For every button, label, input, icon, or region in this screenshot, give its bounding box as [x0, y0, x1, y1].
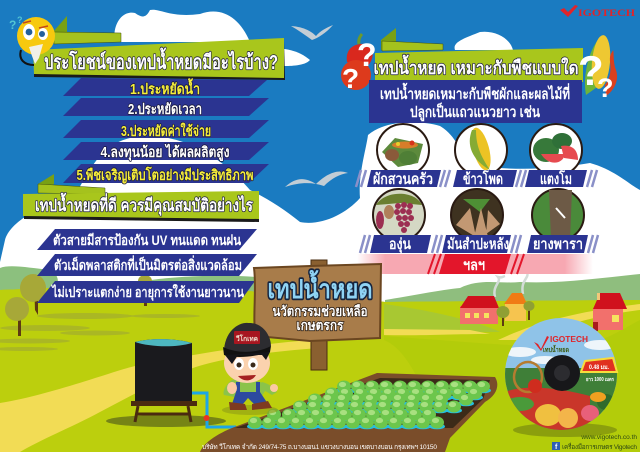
irrigation pipe — [192, 393, 236, 427]
benefit 2 — [63, 98, 269, 118]
product disc: ยาว 1000 เมตร — [586, 377, 614, 383]
benefit 5 — [63, 164, 269, 184]
far hills centre — [130, 276, 280, 300]
heading: benefits banner — [33, 16, 285, 80]
cloud: small right of banner — [268, 48, 310, 66]
village trees — [496, 301, 534, 326]
far hills left — [0, 266, 58, 292]
icon: thinking face: ? — [17, 15, 22, 25]
callout: crops suited text: เทปน้ำหยดเหมาะกับพืชผักและผลไม้ที่ — [380, 82, 570, 103]
quality 1: ตัวสายมีสารป้องกัน UV ทนแดด ทนฝน — [53, 232, 241, 248]
crop label: ยางพารา — [533, 236, 583, 253]
darker green field right — [384, 304, 500, 332]
label: etc — [428, 254, 524, 274]
product disc: เทปน้ำหยด — [543, 344, 569, 354]
footer: company address: บริษัท วีโกเทค จำกัด 249/74-75 ถ.บางบอน1 แขวงบางบอน เขตบางบอน กรุงเทพฯ 10150 — [202, 443, 437, 451]
benefit 3 — [63, 120, 269, 140]
quality 1 — [37, 229, 257, 250]
footer: facebook — [552, 442, 637, 451]
icon: thinking face: ? — [9, 18, 16, 32]
quality 3 — [37, 281, 255, 303]
product disc: 0.48 มม. — [589, 364, 609, 371]
benefit 1: 1.ประหยัดน้ำ — [130, 78, 200, 98]
logo: Vigotech — [560, 5, 636, 19]
icon: thinking face — [9, 15, 55, 65]
heading: suitable crops banner — [374, 28, 583, 82]
wooden sign: เกษตรกร — [296, 317, 344, 333]
path right — [384, 329, 490, 335]
icon: pepper and tomato with question marks: ? — [357, 37, 377, 73]
quality 3: ไม่เปราะแตกง่าย อายุการใช้งานยาวนาน — [50, 283, 244, 301]
crop label: แตงโม — [540, 169, 572, 188]
product disc — [504, 318, 617, 437]
heading: qualities banner: เทปน้ำหยดที่ดี ควรมีคุณสมบัติอย่างไร — [35, 192, 254, 216]
callout: crops suited text — [369, 80, 582, 123]
farmer boy mascot: วีโกเทค — [235, 334, 258, 343]
label: etc: ฯลฯ — [463, 257, 485, 274]
benefit 1 — [63, 78, 267, 98]
quality 2 — [37, 254, 257, 276]
sign subtitle: นวัตกรรมช่วยเหลือ — [272, 303, 368, 319]
footer: facebook: เครื่องมือการเกษตร Vigotech — [562, 442, 637, 451]
birds — [285, 25, 348, 187]
house 2 — [504, 293, 527, 321]
benefit 4: 4.ลงทุนน้อย ได้ผลผลิตสูง — [100, 143, 230, 161]
pink band — [357, 254, 593, 274]
footer: website: www.vigotech.co.th — [580, 434, 637, 441]
crop label: ข้าวโพด — [463, 169, 503, 188]
far hills right — [385, 274, 640, 310]
farm plot — [200, 373, 497, 452]
quality 2: ตัวเม็ดพลาสติกที่เป็นมิตรต่อสิ่งแวดล้อม — [54, 255, 242, 273]
banner shape — [34, 41, 285, 80]
product disc: IGOTECH — [550, 335, 588, 344]
cloud bank — [0, 122, 640, 320]
crop label: องุ่น — [389, 236, 412, 254]
heading: qualities banner — [23, 174, 259, 222]
benefit 4 — [63, 142, 269, 161]
crop: cassava — [432, 189, 521, 253]
wooden sign — [254, 260, 381, 370]
icon: corn and chili with question marks — [578, 34, 617, 103]
banner title: ประโยชน์ของเทปน้ำหยดมีอะไรบ้าง? — [44, 47, 278, 74]
list: qualities — [37, 229, 257, 303]
sign title: เทปน้ำหยด — [268, 269, 372, 304]
banner fold — [53, 16, 121, 44]
cloud: top centre — [114, 10, 250, 42]
icon: corn and chili with question marks: ? — [597, 73, 614, 103]
crop: rubber tree — [527, 189, 598, 253]
benefit 2: 2.ประหยัดเวลา — [128, 102, 202, 118]
icon: pepper and tomato with question marks — [341, 34, 377, 94]
house 3 — [593, 293, 627, 331]
crop label: มันสำปะหลัง — [447, 236, 509, 253]
yellow path — [0, 340, 320, 452]
sign post — [311, 260, 327, 370]
farmer boy mascot — [222, 323, 278, 415]
smoke from chimneys — [494, 265, 538, 297]
crop: grapes — [360, 189, 431, 254]
cloud: behind crops banner — [455, 32, 513, 50]
icon: pepper and tomato with question marks: ? — [342, 63, 359, 94]
logo: Vigotech: IGOTECH — [578, 9, 636, 19]
house 1 — [460, 296, 499, 324]
crop label: ผักสวนครัว — [373, 171, 433, 188]
list: benefits — [63, 78, 269, 184]
footer: facebook: f — [555, 444, 558, 451]
sign board — [254, 264, 381, 341]
trees left — [5, 274, 152, 336]
crop: corn — [453, 124, 526, 188]
water tank — [106, 339, 226, 427]
lettuce rows — [247, 380, 491, 429]
heading: suitable crops banner: เทปน้ำหยด เหมาะกับพืชแบบใด — [374, 54, 578, 78]
crop: watermelon — [525, 124, 597, 188]
field shadow strokes — [0, 313, 200, 351]
ground — [0, 280, 640, 452]
icon: corn and chili with question marks: ? — [578, 47, 604, 94]
benefit 5: 5.พืชเจริญเติบโตอย่างมีประสิทธิภาพ — [76, 166, 254, 184]
callout: crops suited text: ปลูกเป็นแถวแนวยาว เช่น — [410, 102, 541, 122]
benefit 3: 3.ประหยัดค่าใช้จ่าย — [121, 122, 211, 140]
crop: garden vegetables — [356, 124, 450, 188]
